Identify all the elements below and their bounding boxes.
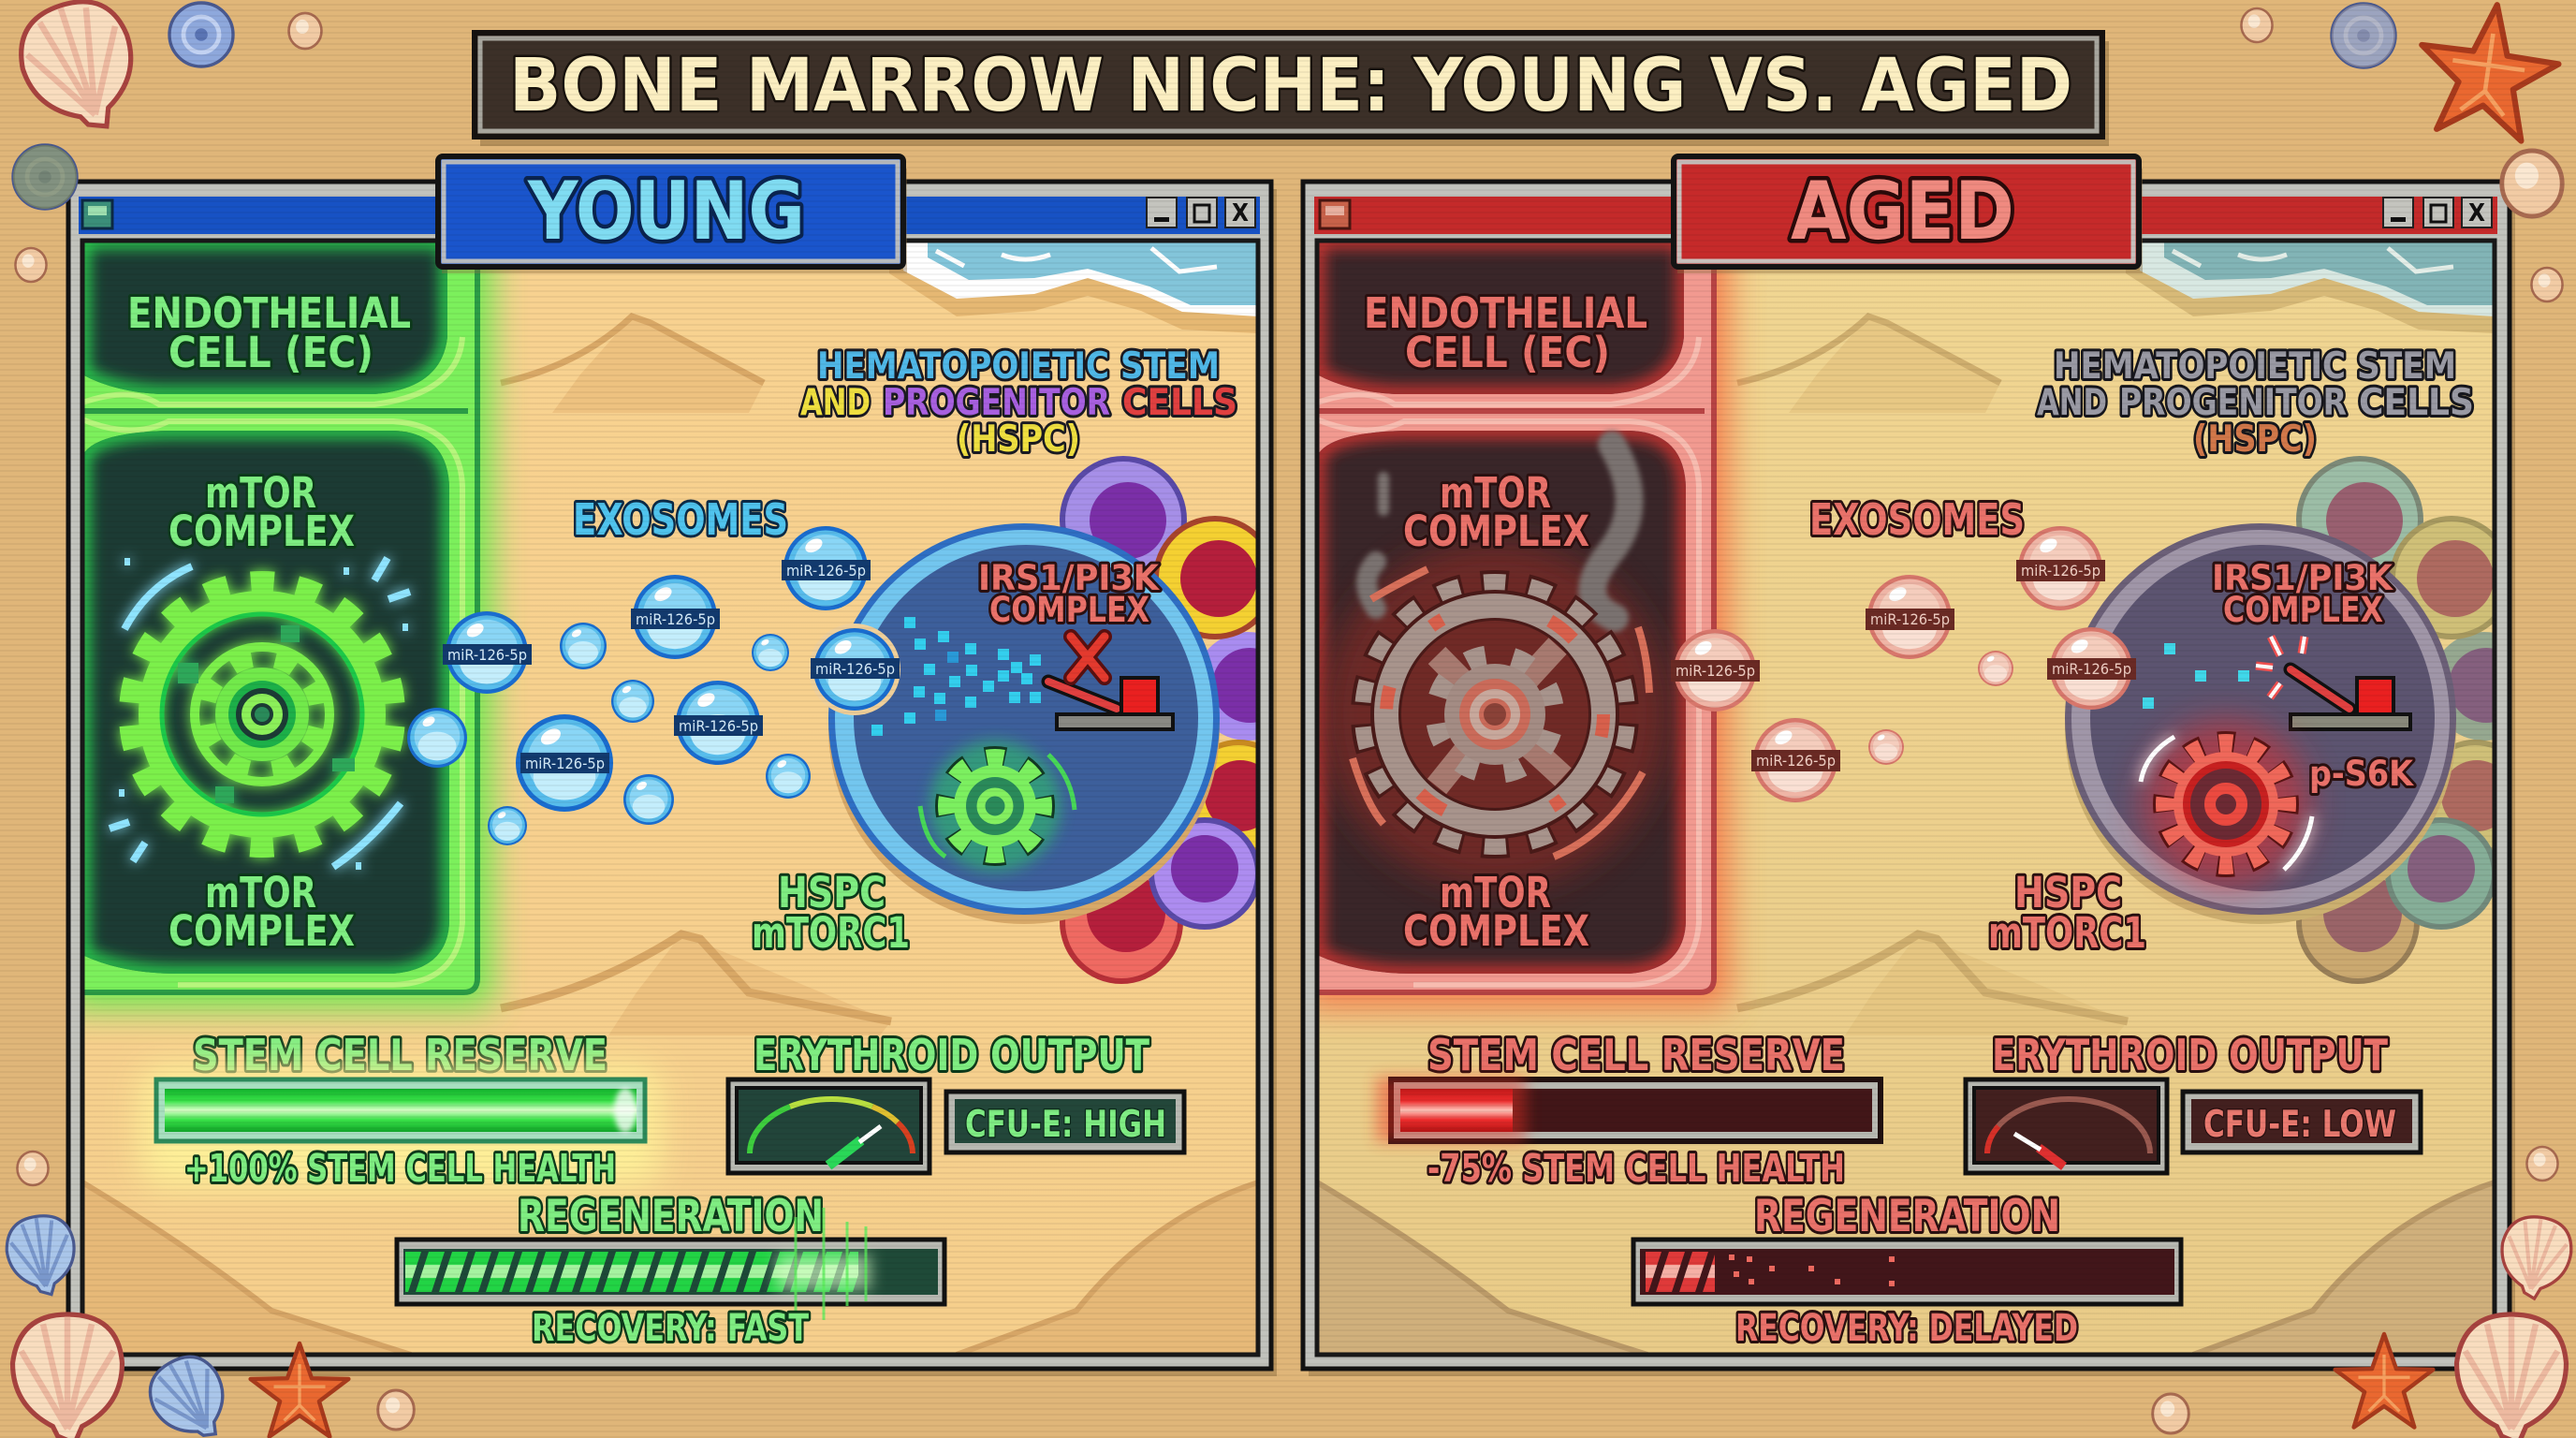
exosome bubbles aged: miR-126-5p — [2052, 660, 2131, 678]
endothelial label — [127, 288, 411, 377]
stem cell health text aged: -75% STEM CELL HEALTH — [1427, 1146, 1845, 1191]
energy sparks — [110, 558, 410, 867]
HSPC mTORC1 label young: HSPC — [778, 868, 886, 917]
endothelial membrane — [75, 234, 480, 994]
stem cell health text young: +100% STEM CELL HEALTH — [184, 1146, 616, 1191]
mTOR complex label top: COMPLEX — [1403, 506, 1589, 556]
exosome bubbles aged: miR-126-5p — [1756, 752, 1836, 770]
mTOR complex label top: mTOR — [1440, 468, 1551, 518]
HSPC title label: STEM — [2357, 345, 2456, 388]
window buttons — [1147, 198, 1255, 227]
IRS1/PI3K label young — [978, 558, 1160, 630]
HSPC title label: PROGENITOR — [2119, 382, 2347, 424]
IRS1/PI3K label aged: IRS1/PI3K — [2212, 558, 2393, 598]
mTOR compartment interior — [82, 431, 449, 974]
mTOR complex label top — [1403, 468, 1589, 556]
recovery text young: RECOVERY: FAST — [532, 1307, 810, 1350]
exosome bubbles young: miR-126-5p — [786, 562, 866, 580]
young tab — [438, 156, 907, 273]
HSPC title label: PROGENITOR — [883, 382, 1110, 424]
HSPC cell aged — [2065, 523, 2456, 924]
broken switch aged — [2256, 637, 2410, 729]
mTOR complex label bottom: mTOR — [1440, 868, 1551, 917]
exosome bubbles young: miR-126-5p — [815, 660, 895, 678]
regeneration heading young: REGENERATION — [518, 1191, 824, 1242]
recovery text aged: RECOVERY: DELAYED — [1735, 1307, 2078, 1350]
HSPC title label: HEMATOPOIETIC — [2054, 345, 2346, 388]
surrounding progenitor cells — [1060, 456, 1302, 984]
signal particles young — [871, 617, 1041, 736]
regeneration heading aged: REGENERATION — [1754, 1191, 2060, 1242]
endothelial label: ENDOTHELIAL — [1364, 288, 1647, 338]
panel: young window — [66, 156, 1302, 1376]
endothelial label: CELL (EC) — [168, 328, 373, 377]
HSPC mTORC1 label young — [752, 868, 910, 958]
endothelial cell interior — [1317, 241, 1684, 394]
mTORC1 gear young — [920, 741, 1075, 872]
sand dunes — [1317, 316, 2495, 1355]
regeneration bar aged — [1633, 1240, 2181, 1304]
HSPC title label: AND — [2037, 382, 2107, 424]
regeneration bar young — [397, 1208, 944, 1320]
HSPC title label: HEMATOPOIETIC — [817, 345, 1109, 388]
client area: faded beach — [1303, 225, 2539, 1355]
HSPC title label: (HSPC) — [2193, 418, 2317, 461]
title text: BONE MARROW NICHE: YOUNG VS. AGED — [509, 44, 2072, 128]
CFU-E readout young: CFU-E: HIGH — [965, 1104, 1166, 1146]
exosomes label: EXOSOMES — [1809, 494, 2025, 545]
signal particles aged — [2143, 643, 2249, 709]
HSPC title label: CELLS — [2359, 382, 2474, 424]
mTOR gear aged: rusted — [1353, 569, 1649, 857]
mTOR complex label bottom: COMPLEX — [1403, 906, 1589, 956]
endothelial label — [1364, 288, 1647, 377]
HSPC title label: CELLS — [1122, 382, 1237, 424]
gauge aged — [1966, 1079, 2167, 1173]
aged tab — [1674, 156, 2143, 273]
HSPC cell young — [828, 523, 1220, 924]
exosome bubbles young: miR-126-5p — [447, 646, 527, 664]
sand dunes — [82, 316, 1258, 1355]
icon: window icon — [1320, 200, 1350, 228]
HSPC mTORC1 label aged — [1988, 868, 2146, 958]
surrounding progenitor cells, faded — [2296, 456, 2539, 984]
IRS1/PI3K label young: IRS1/PI3K — [978, 558, 1160, 598]
exosome bubbles young — [407, 526, 900, 845]
decorative shells: top right — [2241, 0, 2566, 301]
IRS1/PI3K label aged: COMPLEX — [2223, 590, 2383, 630]
title banner — [475, 33, 2109, 146]
stem cell reserve bar aged — [1376, 1077, 1881, 1142]
icon: window icon — [82, 200, 112, 228]
HSPC mTORC1 label young: mTORC1 — [752, 908, 910, 958]
decorative shells: top left — [7, 0, 321, 282]
IRS1/PI3K label young: COMPLEX — [989, 590, 1149, 630]
IRS1/PI3K label aged — [2212, 558, 2393, 630]
erythroid output heading aged: ERYTHROID OUTPUT — [1992, 1030, 2388, 1080]
stem cell reserve bar young — [140, 1065, 661, 1187]
exosome bubbles young: miR-126-5p — [525, 755, 605, 772]
window buttons — [2383, 198, 2492, 227]
panel: aged window — [1303, 156, 2539, 1376]
HSPC title label: STEM — [1120, 345, 1220, 388]
HSPC mTORC1 label aged: mTORC1 — [1988, 908, 2146, 958]
mTOR complex label bottom: COMPLEX — [168, 906, 355, 956]
smoke — [1367, 445, 1630, 618]
mTOR complex label bottom — [168, 868, 355, 956]
endothelial glow — [66, 225, 492, 1007]
HSPC title label: AND — [800, 382, 871, 424]
mTOR complex label bottom: mTOR — [205, 868, 316, 917]
HSPC title label: (HSPC) — [957, 418, 1080, 461]
endothelial cell interior — [82, 241, 447, 394]
CFU-E readout young — [946, 1092, 1184, 1152]
endothelial label: CELL (EC) — [1405, 328, 1610, 377]
exosome bubbles aged: miR-126-5p — [1676, 662, 1755, 680]
endothelial membrane — [1310, 234, 1717, 994]
water and foam — [2126, 241, 2495, 333]
CFU-E readout aged — [2183, 1092, 2421, 1152]
stem cell reserve heading: STEM CELL RESERVE — [193, 1030, 607, 1080]
endothelial label: ENDOTHELIAL — [127, 288, 411, 338]
erythroid output heading young: ERYTHROID OUTPUT — [754, 1030, 1149, 1080]
exosome bubbles aged: miR-126-5p — [1870, 610, 1950, 628]
young tab: YOUNG — [527, 165, 805, 258]
stem cell reserve heading aged: STEM CELL RESERVE — [1427, 1030, 1845, 1080]
endothelial glow — [1303, 225, 1730, 1007]
exosome bubbles young: miR-126-5p — [679, 717, 758, 735]
overactive mTORC1 gear aged — [2141, 720, 2312, 888]
mTOR gear young — [133, 585, 391, 844]
mTOR complex label top: COMPLEX — [168, 506, 355, 556]
exosome bubbles aged: miR-126-5p — [2021, 562, 2100, 580]
decorative shells: bottom left — [3, 1152, 414, 1438]
water and foam — [889, 241, 1258, 333]
HSPC mTORC1 label aged: HSPC — [2014, 868, 2122, 917]
exosomes label: EXOSOMES — [573, 494, 788, 545]
inhibited switch young — [1048, 637, 1173, 729]
p-S6K label: p-S6K — [2309, 754, 2414, 794]
HSPC title label — [800, 345, 1237, 461]
mTOR complex label bottom — [1403, 868, 1589, 956]
window buttons: X — [1232, 199, 1249, 227]
mTOR compartment interior — [1317, 431, 1686, 974]
CFU-E readout aged: CFU-E: LOW — [2203, 1104, 2396, 1146]
window buttons: X — [2468, 199, 2485, 227]
HSPC title label — [2037, 345, 2474, 461]
gauge young — [728, 1079, 929, 1173]
exosome bubbles young: miR-126-5p — [636, 610, 715, 628]
mTOR complex label top — [168, 468, 355, 556]
decorative shells: bottom right — [2153, 1147, 2575, 1438]
aged tab: AGED — [1791, 165, 2014, 258]
client area: beach — [66, 225, 1302, 1355]
mTOR complex label top: mTOR — [205, 468, 316, 518]
exosome bubbles aged — [1671, 526, 2136, 802]
